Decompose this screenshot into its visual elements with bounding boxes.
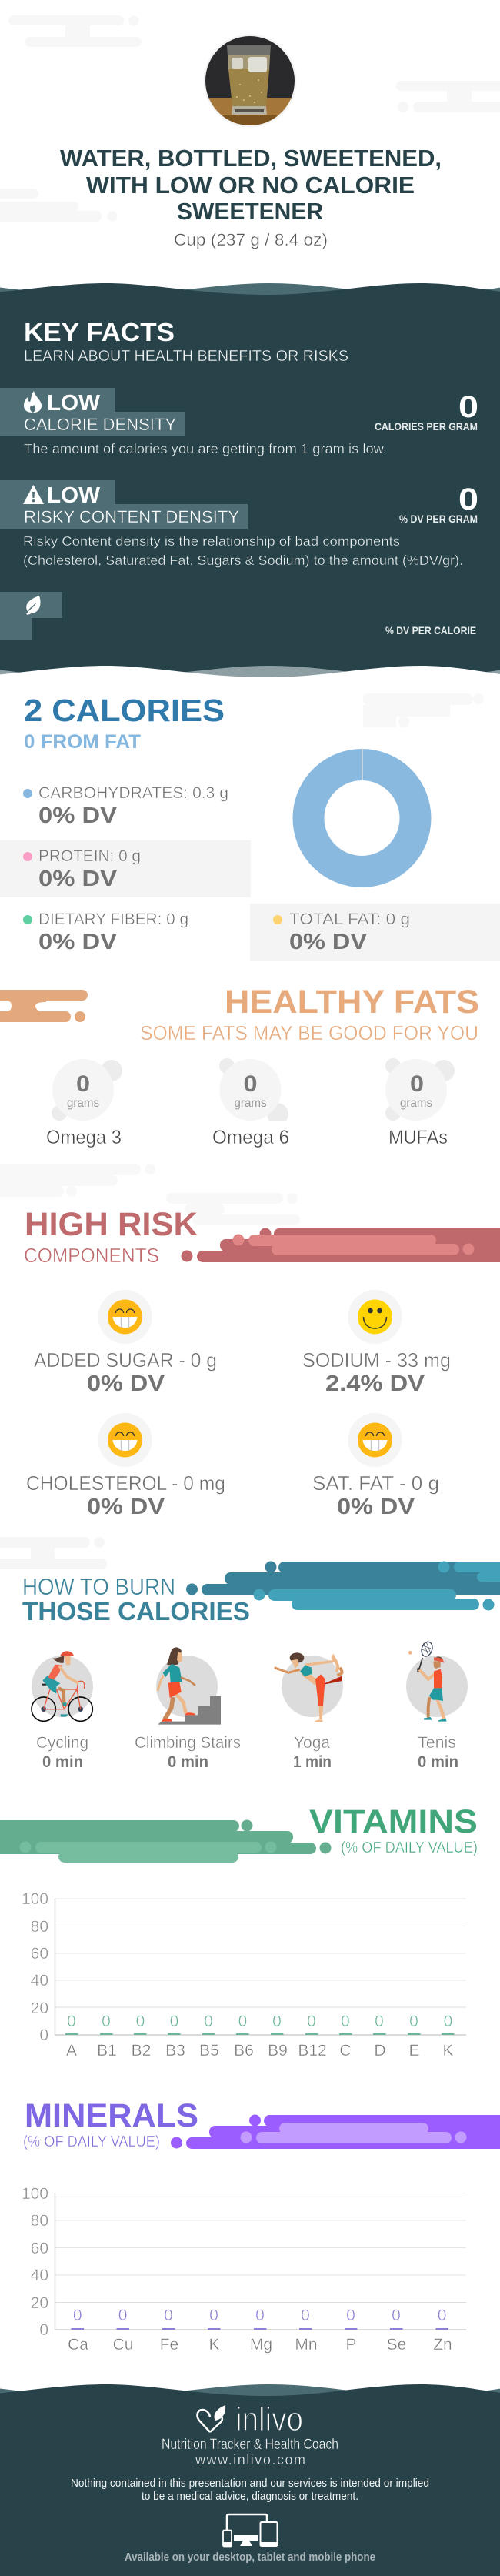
disclaimer xyxy=(71,2477,429,2503)
decoration: burn banner xyxy=(186,1561,500,1610)
tagline: Nutrition Tracker & Health Coach xyxy=(162,2437,338,2453)
risk item: sodium: SODIUM - 33 mg xyxy=(302,1348,451,1372)
bar chart: vitamins: A xyxy=(66,2042,77,2060)
fat item: MUFAs: grams xyxy=(400,1097,432,1110)
bar chart: vitamins: B9 xyxy=(268,2042,288,2060)
bar chart: vitamins xyxy=(22,1890,466,2060)
panel: key facts xyxy=(0,283,500,687)
activity: cycling: Cycling xyxy=(36,1734,88,1752)
subheading: healthy fats: SOME FATS MAY BE GOOD FOR YOU xyxy=(140,1021,478,1044)
bar chart: minerals: 20 xyxy=(31,2294,48,2312)
bar chart: minerals: Mn xyxy=(295,2336,318,2354)
activity: tennis: Tenis xyxy=(418,1734,456,1752)
fat item: MUFAs: 0 xyxy=(410,1071,424,1097)
unit: CALORIES PER GRAM xyxy=(375,420,478,433)
bar chart: minerals: 40 xyxy=(31,2267,48,2284)
bar chart: minerals: 0 xyxy=(346,2307,355,2324)
heading: healthy fats: HEALTHY FATS xyxy=(225,984,479,1021)
bar chart: vitamins: 0 xyxy=(238,2013,247,2030)
bar chart: vitamins: 40 xyxy=(31,1972,48,1990)
icon: tennis player xyxy=(408,1640,447,1722)
risk item: saturated fat: SAT. FAT - 0 g xyxy=(312,1472,439,1495)
heading: calories: 2 CALORIES xyxy=(24,693,225,728)
macro: total fat: TOTAL FAT: 0 g xyxy=(289,910,410,928)
bar chart: vitamins: 0 xyxy=(409,2013,418,2030)
bar chart: vitamins: 0 xyxy=(204,2013,213,2030)
bar chart: vitamins: B1 xyxy=(97,2042,117,2060)
bar chart: vitamins: 60 xyxy=(31,1945,48,1963)
bar chart: minerals: 0 xyxy=(301,2307,310,2324)
risk item: added sugar: 0% DV xyxy=(87,1372,165,1396)
macro: carbohydrates xyxy=(23,784,228,828)
icon: yoga pose xyxy=(275,1652,342,1722)
bar chart: vitamins: 0 xyxy=(307,2013,316,2030)
bar chart: minerals: 0 xyxy=(438,2307,446,2324)
nutrient density block xyxy=(0,592,476,640)
bar chart: vitamins: 20 xyxy=(31,2000,48,2017)
macro: dietary fiber xyxy=(23,910,188,954)
bar chart: minerals: 0 xyxy=(39,2321,48,2339)
calorie density block xyxy=(0,388,478,456)
risk item: added sugar xyxy=(34,1290,217,1396)
bar chart: vitamins: 0 xyxy=(272,2013,282,2030)
bar chart: minerals: Ca xyxy=(68,2336,88,2354)
fat item: omega 6: Omega 6 xyxy=(212,1127,289,1148)
heading: vitamins: VITAMINS xyxy=(309,1803,478,1840)
risk item: cholesterol: 0% DV xyxy=(87,1495,165,1519)
logo: inlivo: inlivo xyxy=(235,2401,303,2438)
activity: climbing stairs xyxy=(135,1647,241,1771)
activity: yoga: 1 min xyxy=(293,1753,332,1771)
macro: carbohydrates: CARBOHYDRATES: 0.3 g xyxy=(38,784,228,802)
bar chart: vitamins: 0 xyxy=(102,2013,111,2030)
title: WATER, BOTTLED, SWEETENED, xyxy=(60,145,442,172)
bar chart: minerals: Cu xyxy=(113,2336,133,2354)
icon: smile face xyxy=(358,1299,392,1335)
bar chart: minerals: K xyxy=(208,2336,220,2354)
risk item: cholesterol xyxy=(26,1413,225,1519)
bar chart: minerals: 100 xyxy=(22,2185,48,2203)
activity: cycling xyxy=(32,1651,93,1771)
rating: low: LOW xyxy=(47,391,101,416)
bar chart: vitamins: B3 xyxy=(165,2042,185,2060)
activity: yoga xyxy=(275,1652,343,1771)
rating: low: LOW xyxy=(47,483,101,508)
icon: flame xyxy=(24,391,42,413)
title: SWEETENER xyxy=(177,198,323,225)
bar chart: vitamins: 0 xyxy=(67,2013,76,2030)
bar chart: vitamins: E xyxy=(408,2042,420,2060)
panel: footer xyxy=(0,2384,500,2576)
bar chart: minerals: P xyxy=(345,2336,357,2354)
bar chart: minerals: Zn xyxy=(433,2336,452,2354)
risk item: saturated fat: 0% DV xyxy=(337,1495,415,1519)
icon: woman climbing stairs xyxy=(158,1647,221,1725)
bar chart: minerals: 0 xyxy=(209,2307,218,2324)
description xyxy=(23,533,463,568)
bar chart: vitamins: 0 xyxy=(39,2026,48,2044)
subheading: components: COMPONENTS xyxy=(24,1244,159,1267)
risky content density block xyxy=(0,480,478,568)
fat item: MUFAs: MUFAs xyxy=(388,1127,448,1148)
macro: dietary fiber: DIETARY FIBER: 0 g xyxy=(38,910,188,928)
value: 0 xyxy=(458,390,478,424)
bar chart: vitamins: K xyxy=(442,2042,454,2060)
bar chart: minerals: 0 xyxy=(164,2307,173,2324)
value: 0 xyxy=(458,483,478,516)
macro: total fat: 0% DV xyxy=(289,930,368,954)
bar chart: minerals: 0 xyxy=(392,2307,401,2324)
bar chart: minerals xyxy=(22,2185,466,2354)
risk item: cholesterol: CHOLESTEROL - 0 mg xyxy=(26,1472,225,1495)
heading: how to burn: HOW TO BURN xyxy=(22,1573,175,1600)
decoration: healthy fats banner xyxy=(0,990,88,1022)
donut chart xyxy=(308,748,415,871)
activity: tennis: 0 min xyxy=(418,1753,458,1771)
title xyxy=(60,145,442,225)
fat item: MUFAs xyxy=(385,1058,455,1148)
subheading: calories from fat: 0 FROM FAT xyxy=(24,731,141,753)
bar chart: vitamins: B5 xyxy=(199,2042,219,2060)
title: WITH LOW OR NO CALORIE xyxy=(86,172,415,199)
fat item: omega 6: grams xyxy=(234,1097,266,1110)
icon: warning triangle xyxy=(23,485,44,504)
risk item: added sugar: ADDED SUGAR - 0 g xyxy=(34,1348,217,1372)
label: RISKY CONTENT DENSITY xyxy=(24,507,239,526)
icon: grin face xyxy=(108,1299,142,1335)
bar chart: vitamins: B12 xyxy=(298,2042,327,2060)
risk item: saturated fat xyxy=(312,1413,439,1519)
website link: www.inlivo.com xyxy=(195,2452,305,2467)
description: (Cholesterol, Saturated Fat, Sugars & Sodium) to the amount (%DV/gr). xyxy=(23,553,463,568)
icon: cyclist xyxy=(32,1651,92,1721)
bar chart: vitamins: 100 xyxy=(22,1890,48,1908)
macro: protein xyxy=(0,840,251,897)
bar chart: vitamins: 0 xyxy=(136,2013,145,2030)
risk item: sodium xyxy=(302,1290,451,1396)
bar chart: minerals: 80 xyxy=(31,2212,48,2230)
decoration: high risk banner xyxy=(182,1228,500,1262)
fat item: omega 6 xyxy=(212,1058,289,1148)
activity: cycling: 0 min xyxy=(42,1753,83,1771)
description: Risky Content density is the relationship of bad components xyxy=(23,533,400,549)
icon: grin face xyxy=(358,1422,392,1458)
macro: total fat xyxy=(250,904,500,961)
bar chart: vitamins: 0 xyxy=(170,2013,178,2030)
activity: yoga: Yoga xyxy=(294,1734,330,1752)
activity: tennis xyxy=(406,1640,468,1771)
food photo: glass of sweetened water xyxy=(203,34,297,128)
subheading: minerals: (% OF DAILY VALUE) xyxy=(23,2133,160,2150)
bar chart: vitamins: B2 xyxy=(132,2042,151,2060)
description: The amount of calories you are getting from 1 gram is low. xyxy=(24,441,387,456)
fat item: omega 6: 0 xyxy=(243,1071,257,1097)
availability note: Available on your desktop, tablet and mobile phone xyxy=(125,2551,375,2564)
heading: those calories: THOSE CALORIES xyxy=(22,1597,250,1625)
fat item: omega 3: 0 xyxy=(76,1071,90,1097)
activity: climbing stairs: Climbing Stairs xyxy=(135,1734,241,1752)
serving size: Cup (237 g / 8.4 oz) xyxy=(174,230,328,249)
bar chart: minerals: Se xyxy=(387,2336,406,2354)
subheading: vitamins: (% OF DAILY VALUE) xyxy=(341,1839,478,1856)
macro: protein: 0% DV xyxy=(38,867,118,891)
bar chart: vitamins: 0 xyxy=(375,2013,384,2030)
macro: dietary fiber: 0% DV xyxy=(38,930,118,954)
bar chart: vitamins: 0 xyxy=(341,2013,350,2030)
risk item: sodium: 2.4% DV xyxy=(325,1372,425,1396)
bar chart: vitamins: C xyxy=(339,2042,352,2060)
bar chart: minerals: Fe xyxy=(160,2336,178,2354)
unit: % DV PER GRAM xyxy=(399,513,478,525)
unit: % DV PER CALORIE xyxy=(385,624,476,636)
heading: high risk: HIGH RISK xyxy=(25,1206,198,1243)
macro: carbohydrates: 0% DV xyxy=(38,804,118,828)
disclaimer: to be a medical advice, diagnosis or treatment. xyxy=(142,2490,358,2503)
label: CALORIE DENSITY xyxy=(24,415,176,434)
fat item: omega 3 xyxy=(46,1059,122,1148)
subheading: LEARN ABOUT HEALTH BENEFITS OR RISKS xyxy=(24,348,348,365)
macro: protein: PROTEIN: 0 g xyxy=(38,847,141,865)
bar chart: minerals: 0 xyxy=(73,2307,82,2324)
heading: key facts: KEY FACTS xyxy=(24,318,175,346)
decoration: minerals banner xyxy=(171,2115,500,2149)
logo: inlivo xyxy=(197,2401,303,2438)
decoration: vitamins banner xyxy=(0,1819,331,1863)
bar chart: vitamins: 0 xyxy=(444,2013,452,2030)
bar chart: minerals: 0 xyxy=(255,2307,265,2324)
icon: leaf xyxy=(26,596,41,615)
bar chart: vitamins: D xyxy=(374,2042,386,2060)
fat item: omega 3: Omega 3 xyxy=(46,1127,122,1148)
icon: grin face xyxy=(108,1422,142,1458)
icon: devices xyxy=(223,2514,278,2546)
bar chart: minerals: Mg xyxy=(250,2336,272,2354)
bar chart: minerals: 0 xyxy=(118,2307,127,2324)
bar chart: vitamins: B6 xyxy=(234,2042,254,2060)
disclaimer: Nothing contained in this presentation and our services is intended or implied xyxy=(71,2477,429,2490)
activity: climbing stairs: 0 min xyxy=(168,1753,208,1771)
bar chart: vitamins: 80 xyxy=(31,1918,48,1936)
fat item: omega 3: grams xyxy=(67,1097,99,1110)
bar chart: minerals: 60 xyxy=(31,2240,48,2257)
heading: minerals: MINERALS xyxy=(25,2097,198,2134)
